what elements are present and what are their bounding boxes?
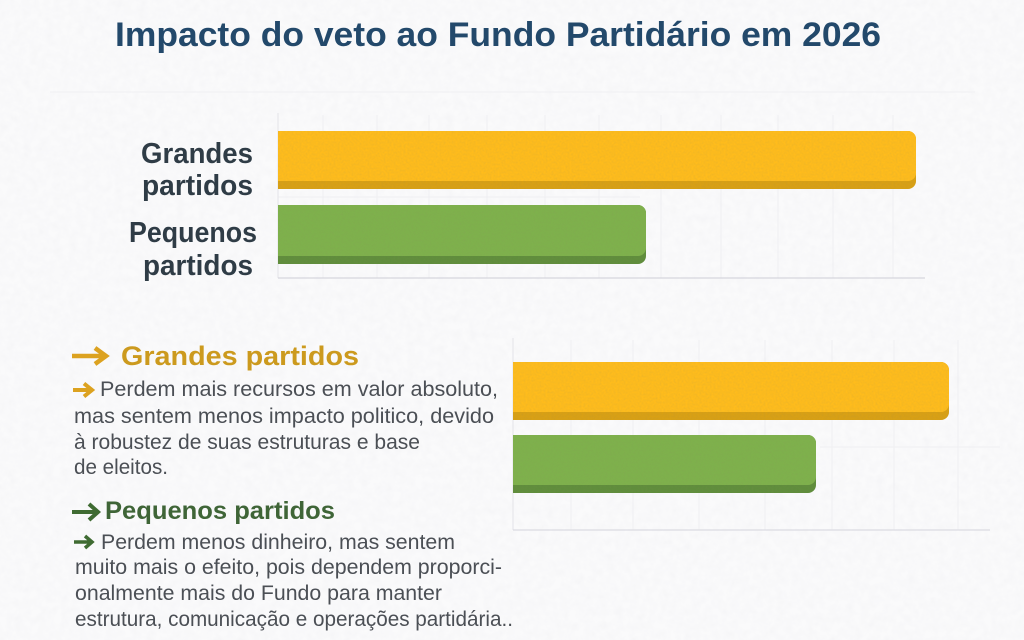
bar: Grandes partidos [278,131,916,189]
body text: Pequenos partidos: Perdem menos dinheiro, mas sentem [101,530,455,554]
icon: green bullet arrow [74,536,92,548]
bar: Grandes partidos [513,362,949,420]
body text: Grandes partidos: de eleitos. [74,455,168,479]
body text: Grandes partidos [74,377,498,479]
body text: Grandes partidos: Perdem mais recursos em valor absoluto, [100,377,498,401]
body text: Grandes partidos: à robustez de suas estruturas e base [74,430,420,454]
bar: Pequenos partidos [513,435,816,493]
body text: Pequenos partidos: onalmente mais do Fundo para manter [75,581,442,605]
panel: Grandes partidos text [72,341,498,479]
bottom bar chart [513,338,1000,530]
icon: green heading arrow [72,504,98,520]
top chart gridlines [278,113,925,278]
category label: Pequenos partidos: partidos [143,250,253,282]
title: Impacto do veto ao Fundo Partidário em 2026 [115,16,881,54]
icon: gold heading arrow [72,348,106,364]
category label: Grandes partidos: Grandes [141,138,253,170]
body text: Grandes partidos: mas sentem menos impacto politico, devido [74,404,494,428]
category label: Pequenos partidos: Pequenos [129,217,257,249]
icon: gold bullet arrow [73,384,92,396]
category label: Pequenos partidos [129,217,257,282]
top bar chart [129,113,925,282]
heading: Grandes partidos: Grandes partidos [121,341,359,371]
bar: Pequenos partidos [278,205,646,264]
body text: Pequenos partidos: estrutura, comunicação e operações partidária.. [75,607,513,631]
heading: Pequenos partidos: Pequenos partidos [105,497,335,525]
category label: Grandes partidos [141,138,253,202]
bottom chart gridlines [513,338,1000,530]
category label: Grandes partidos: partidos [142,170,253,202]
body text: Pequenos partidos [75,530,513,631]
body text: Pequenos partidos: muito mais o efeito, pois dependem proporci- [75,555,502,579]
panel: Pequenos partidos text [72,497,513,631]
